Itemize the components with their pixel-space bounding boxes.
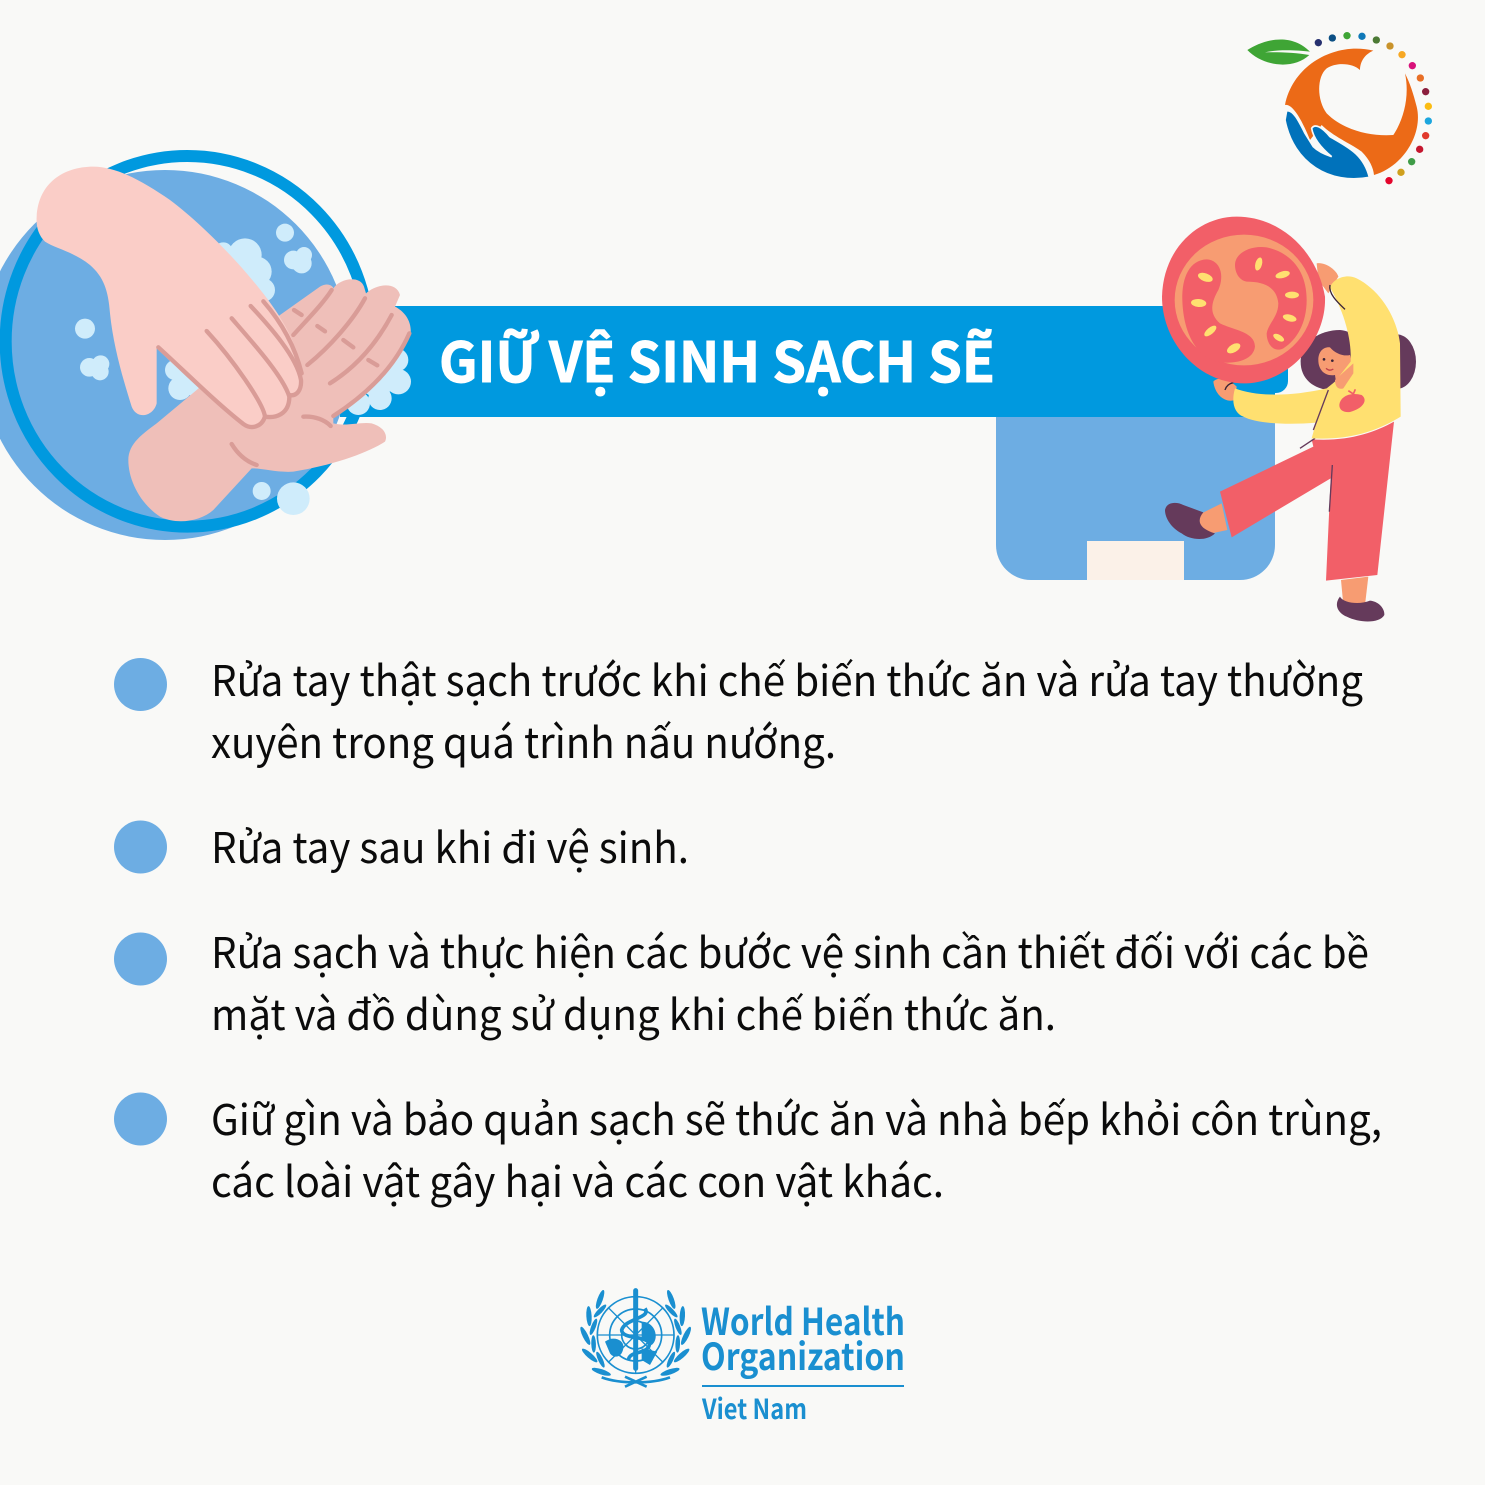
text: bullet 3: [211, 920, 1369, 1043]
logo: heart, leaf, hand and dots: [1247, 32, 1432, 184]
text: bullet 4: [211, 1087, 1382, 1210]
text: World Health Organization Viet Nam: [701, 1292, 905, 1428]
face: [1318, 347, 1353, 389]
sweater: [1233, 276, 1401, 439]
hair: [1377, 334, 1416, 389]
bullet 2: [114, 820, 167, 874]
logo: WHO emblem: [579, 1289, 693, 1387]
text: World Health Organization Viet Nam: Viet Nam: [701, 1388, 807, 1428]
bullet 3: [114, 932, 167, 986]
text: bullet 4: các loài vật gây hại và các con vật khác.: [211, 1149, 944, 1210]
lower hand: [128, 279, 411, 521]
feet: [1200, 503, 1227, 534]
tomato: [1162, 217, 1325, 383]
panel: light blue box under banner: [996, 417, 1275, 580]
text: bullet 2: Rửa tay sau khi đi vệ sinh.: [211, 815, 689, 876]
hand: [1285, 111, 1369, 179]
text: World Health Organization Viet Nam: Organization: [701, 1327, 905, 1381]
text: World Health Organization Viet Nam: World Health: [701, 1292, 905, 1346]
icon: hand washing: [0, 156, 411, 540]
hands: [1317, 263, 1338, 293]
text: bullet 1: Rửa tay thật sạch trước khi chế biến thức ăn và rửa tay thường: [211, 648, 1363, 709]
title: GIỮ VỆ SINH SẠCH SẼ: [439, 318, 995, 398]
text: bullet 1: xuyên trong quá trình nấu nướng.: [211, 710, 836, 771]
text: bullet 3: mặt và đồ dùng sử dụng khi chế biến thức ăn.: [211, 982, 1056, 1043]
pants: [1220, 422, 1394, 581]
bullet 4: [114, 1092, 167, 1146]
text: bullet 1: [211, 648, 1363, 771]
text: bullet 3: Rửa sạch và thực hiện các bước vệ sinh cần thiết đối với các bề: [211, 920, 1369, 981]
bullet 1: [114, 658, 167, 711]
upper hand: [37, 167, 301, 427]
illustration: woman holding tomato: [1162, 217, 1416, 621]
heart ring: [1285, 49, 1418, 175]
text: bullet 4: Giữ gìn và bảo quản sạch sẽ thức ăn và nhà bếp khỏi côn trùng,: [211, 1087, 1382, 1148]
banner bar: [340, 306, 1288, 417]
leaf: [1247, 39, 1310, 65]
